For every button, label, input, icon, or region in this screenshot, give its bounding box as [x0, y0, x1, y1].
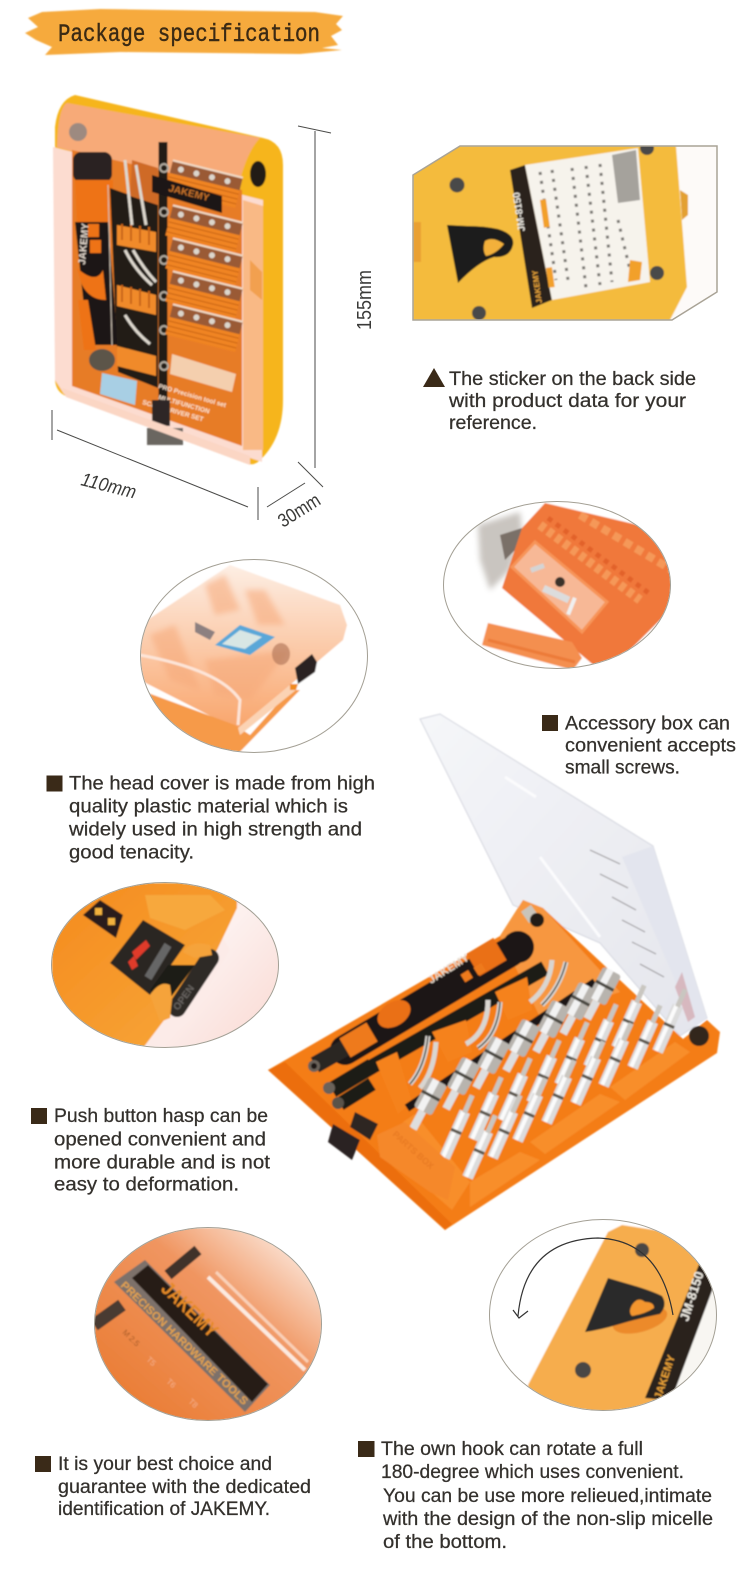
caption: head cover: The head cover is made from high	[69, 774, 375, 794]
button bar	[177, 958, 210, 1008]
detail circle: accessory box	[443, 502, 680, 670]
heading banner: Package specification: Package specification	[58, 20, 320, 49]
caption: sticker on back side: reference.	[449, 413, 537, 434]
tweezers and holders	[376, 960, 566, 1114]
caption: head cover: widely used in high strength and	[68, 820, 362, 841]
case body: SCREWDRIVER SET	[141, 399, 204, 423]
detail photo: sticker on back side: JM-8150	[512, 191, 528, 232]
caption: push button hasp	[31, 1106, 271, 1195]
caption: push button hasp: Push button hasp can be	[54, 1106, 268, 1127]
caption: rotating hook: with the design of the non-slip micelle	[382, 1509, 713, 1530]
orange base	[268, 900, 720, 1230]
caption: push button hasp: easy to deformation.	[54, 1174, 239, 1195]
dimension label 155mm: 155mm	[354, 270, 376, 330]
detail circle: JAKEMY label: PRECISON HARDWARE TOOLS	[118, 1280, 250, 1408]
detail circle: head cover	[140, 559, 368, 760]
detail circle: rotating hook: JAKEMY	[652, 1353, 678, 1401]
hasp	[328, 1112, 378, 1160]
parts box: PARTS BOX	[391, 1129, 436, 1171]
black column	[110, 188, 158, 388]
tweezers slots	[117, 225, 156, 252]
hinge	[689, 1026, 709, 1046]
dimension lines	[52, 126, 331, 520]
second driver rod	[323, 968, 545, 1109]
screw socket on hinge	[521, 905, 544, 927]
caption: head cover	[46, 774, 375, 864]
detail circle: JAKEMY label: JAKEMY	[157, 1278, 223, 1343]
caption: JAKEMY identification	[35, 1454, 311, 1520]
case body: JAKEMY	[77, 222, 92, 265]
rows of bits	[165, 159, 243, 208]
tooth rows	[540, 525, 640, 600]
orange seats	[403, 1042, 690, 1210]
caption: sticker on back side: The sticker on the back side	[449, 369, 696, 390]
handle	[73, 152, 112, 182]
detail circle: JAKEMY label: T6	[165, 1377, 178, 1390]
caption: head cover: good tenacity.	[69, 843, 194, 864]
caption: accessory box: convenient accepts	[565, 736, 736, 756]
detail circle: rotating hook	[489, 1220, 725, 1420]
detail circle: JAKEMY label: M 2.5	[121, 1328, 142, 1349]
black strip	[644, 1264, 712, 1400]
sticker black strip	[510, 165, 552, 308]
caption: rotating hook: of the bottom.	[383, 1532, 507, 1553]
detail circle: JAKEMY label	[94, 1228, 322, 1422]
detail circle: JAKEMY label: T8	[187, 1397, 200, 1410]
rubber feet	[450, 178, 464, 192]
dimension label 30mm: 30mm	[275, 490, 325, 532]
caption: push button hasp: opened convenient and	[54, 1129, 266, 1150]
caption: JAKEMY identification: identification of JAKEMY.	[58, 1499, 270, 1520]
product photo: closed case with dimensions	[52, 95, 376, 532]
dimension label 110mm: 110mm	[79, 469, 138, 503]
caption: accessory box: small screws.	[565, 758, 680, 778]
bit rows	[440, 983, 690, 1180]
case body	[53, 95, 283, 465]
detail circle: rotating hook: JM-8150	[677, 1269, 707, 1323]
main photo: open case with bits and screwdriver	[268, 714, 720, 1230]
screwdriver handle: JAKEMY	[426, 952, 472, 987]
detail circle: JAKEMY label: T5	[145, 1355, 158, 1368]
dark strip	[83, 900, 123, 938]
detail circle: push button hasp	[52, 882, 280, 1052]
heading banner: Package specification	[25, 9, 343, 55]
caption: head cover: quality plastic material which is	[69, 797, 348, 818]
rotation arrow	[513, 1238, 673, 1318]
sticker white area	[525, 148, 650, 300]
centre strip	[158, 142, 168, 405]
sockets	[404, 966, 621, 1133]
rubber feet	[635, 1243, 649, 1257]
caption: JAKEMY identification: It is your best choice and	[58, 1454, 272, 1475]
caption: accessory box	[542, 714, 736, 778]
case body: PRO Precision tool set	[157, 383, 228, 409]
caption: sticker on back side	[423, 368, 696, 434]
bottom logo and blue label	[170, 354, 236, 392]
lugs	[183, 944, 212, 958]
caption: accessory box: Accessory box can	[565, 714, 730, 734]
detail circle: push button hasp: OPEN	[172, 983, 197, 1013]
hinge hole	[250, 161, 266, 187]
hook	[612, 1308, 668, 1334]
transparent lid	[420, 714, 707, 1036]
label	[152, 175, 222, 213]
white rib	[208, 1277, 305, 1370]
caption: rotating hook	[358, 1439, 713, 1553]
peach stripes behind the lid	[150, 575, 290, 700]
caption: rotating hook: 180-degree which uses convenient.	[381, 1462, 684, 1483]
parts box	[377, 1122, 455, 1200]
long black divider	[407, 982, 595, 1108]
caption: JAKEMY identification: guarantee with the dedicated	[58, 1477, 311, 1498]
detail photo: sticker on back side: JAKEMY	[530, 269, 544, 304]
screwdriver handle	[308, 931, 534, 1072]
caption: rotating hook: The own hook can rotate a full	[381, 1439, 643, 1460]
caption: rotating hook: You can be use more relieued,intimate	[383, 1486, 712, 1507]
caption: push button hasp: more durable and is not	[54, 1152, 271, 1173]
caption: sticker on back side: with product data for your	[448, 391, 687, 412]
top block	[145, 895, 225, 930]
black clip	[110, 920, 185, 995]
hook	[447, 225, 513, 283]
compartment	[512, 542, 607, 632]
label	[114, 1260, 270, 1412]
case body: MULTIFUNCTION	[157, 394, 211, 416]
case body: JAKEMY	[167, 183, 211, 204]
separate lid	[482, 623, 582, 670]
dark bars	[94, 1305, 122, 1325]
screws	[542, 585, 570, 603]
detail photo: sticker on back side	[413, 141, 717, 320]
